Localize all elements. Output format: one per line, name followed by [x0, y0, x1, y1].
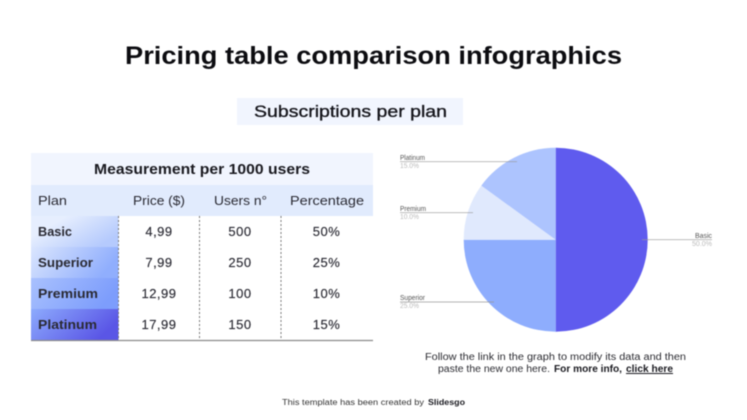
pie label: Premium: 10.0%: [400, 214, 419, 221]
table values: 100: [228, 286, 252, 301]
pie label: Platinum: Platinum: [400, 155, 425, 162]
note text: [425, 352, 686, 375]
table values: 7,99: [145, 255, 173, 270]
table values: 25%: [313, 255, 340, 270]
table values: 15%: [313, 317, 340, 332]
plan name cells: [31, 216, 118, 340]
credit line: [282, 398, 465, 407]
plan name cells: Platinum: [38, 317, 97, 332]
pie label: Basic: [642, 233, 712, 248]
table values: 4,99: [145, 224, 173, 239]
table title row: [31, 153, 373, 185]
pie label: Superior: 25.0%: [400, 303, 419, 310]
plan name cells: Premium: [38, 286, 98, 301]
pie label: Platinum: 15.0%: [400, 163, 419, 170]
table values: 50%: [313, 224, 340, 239]
column dividers: [118, 216, 281, 340]
table header row: Plan: [38, 193, 67, 208]
plan name cells: Superior: [38, 255, 93, 270]
slice: Premium: [464, 186, 556, 240]
pie label: Basic: 50.0%: [692, 241, 712, 248]
pricing table: [31, 153, 373, 340]
table header row: Price ($): [133, 193, 185, 208]
pie chart: [464, 148, 648, 332]
pie label: Platinum: [400, 155, 517, 170]
table title row: Measurement per 1000 users: [94, 161, 310, 178]
table values: 500: [228, 224, 252, 239]
pie label: Superior: [400, 295, 494, 310]
pie label: Superior: Superior: [400, 295, 426, 302]
slice: Superior: [464, 240, 556, 332]
table header row: [31, 185, 373, 216]
table values: 250: [228, 255, 252, 270]
subtitle box: [237, 98, 463, 125]
table values: 150: [228, 317, 252, 332]
table header row: Users n°: [214, 193, 267, 208]
pie label: Premium: [400, 206, 473, 221]
table values: 10%: [313, 286, 340, 301]
note text: Follow the link in the graph to modify its data and then: [425, 352, 686, 363]
table values: 12,99: [141, 286, 177, 301]
table values: 17,99: [141, 317, 177, 332]
plan name cells: Basic: [38, 224, 72, 239]
note text: click here: [626, 364, 673, 375]
pie label: Premium: Premium: [400, 206, 426, 213]
subtitle box: Subscriptions per plan: [254, 102, 447, 121]
credit line: This template has been created by: [282, 398, 424, 407]
title: Pricing table comparison infographics: [125, 42, 622, 70]
note text: paste the new one here.: [438, 364, 550, 375]
pie label: Basic: Basic: [695, 233, 712, 240]
note text: For more info,: [554, 364, 622, 375]
slice: Platinum: [481, 148, 556, 240]
slice: Basic: [556, 148, 648, 332]
table header row: Percentage: [290, 193, 364, 208]
table values: [141, 224, 340, 332]
credit line: Slidesgo: [428, 398, 465, 407]
